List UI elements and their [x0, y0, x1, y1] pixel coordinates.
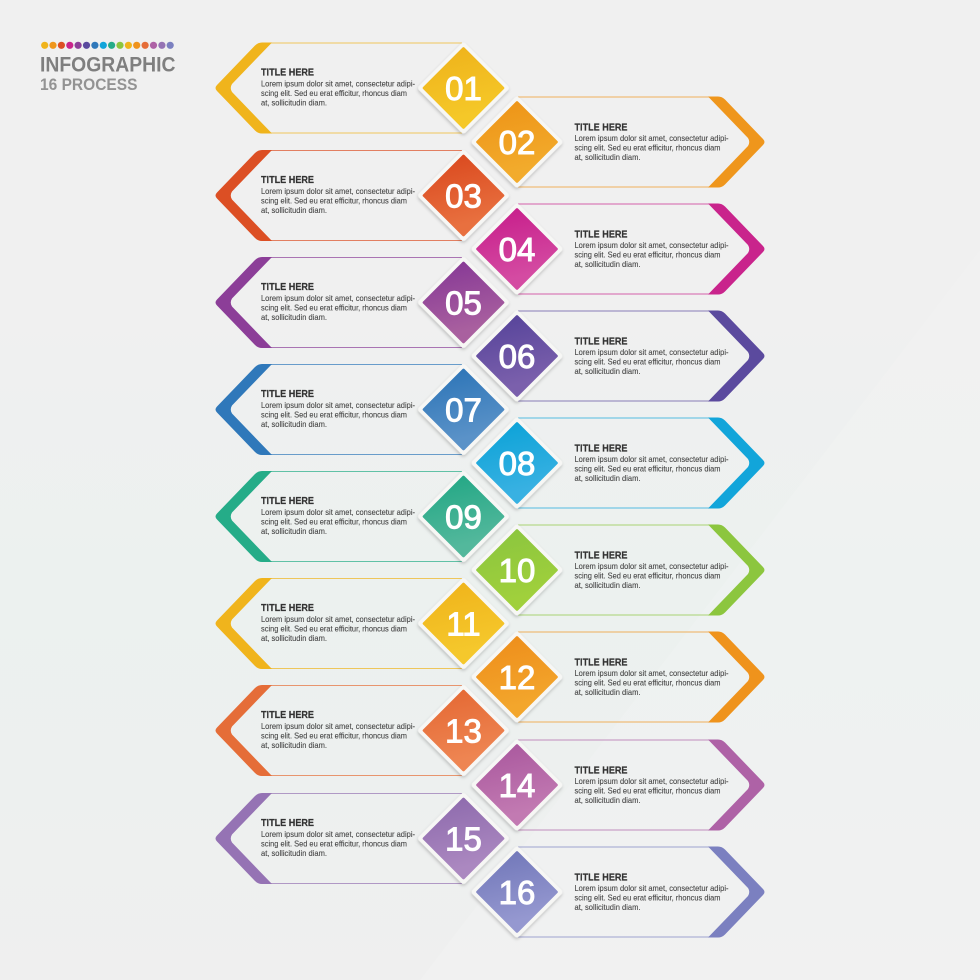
- step 11 panel: [216, 577, 510, 670]
- number badge 15: 15: [445, 820, 482, 858]
- step title: TITLE HERE: [574, 336, 628, 348]
- main heading: INFOGRAPHIC: [40, 54, 176, 76]
- header: infographic title: [40, 42, 176, 94]
- step text: scing elit. Sed eu erat efficitur, rhoncus diam: [574, 250, 720, 260]
- step 02 panel: [470, 95, 764, 189]
- step title: TITLE HERE: [574, 444, 628, 454]
- step text: Lorem ipsum dolor sit amet, consectetur adipi-: [261, 507, 415, 517]
- arrow band: [708, 310, 764, 402]
- number badge 05: 05: [445, 284, 482, 322]
- frame lines: [518, 632, 710, 722]
- number badge 07: 07: [445, 392, 482, 428]
- step title: TITLE HERE: [574, 230, 628, 240]
- step text: [261, 186, 415, 215]
- step text: scing elit. Sed eu erat efficitur, rhoncus diam: [574, 357, 720, 367]
- step text: Lorem ipsum dolor sit amet, consectetur adipi-: [574, 668, 729, 678]
- step text: at, sollicitudin diam.: [261, 205, 327, 215]
- step text: scing elit. Sed eu erat efficitur, rhoncus diam: [261, 196, 407, 206]
- step text: scing elit. Sed eu erat efficitur, rhoncus diam: [261, 410, 407, 420]
- number badge 16: 16: [499, 874, 535, 911]
- step 10 panel: [470, 523, 764, 617]
- arrow band: [708, 632, 764, 722]
- number badge 04: [470, 202, 564, 296]
- number badge 11: 11: [446, 606, 481, 642]
- number badge 08: 08: [499, 445, 535, 482]
- step 07 panel: [216, 363, 510, 456]
- arrow band: [216, 364, 272, 455]
- step title: TITLE HERE: [574, 766, 628, 776]
- arrow band: [708, 96, 764, 188]
- frame lines: [270, 794, 462, 884]
- step text: Lorem ipsum dolor sit amet, consectetur adipi-: [261, 614, 415, 624]
- arrow band: [708, 524, 764, 616]
- step title: TITLE HERE: [261, 818, 314, 829]
- step 04 panel: [470, 202, 764, 296]
- number badge 11: [417, 577, 510, 670]
- step text: scing elit. Sed eu erat efficitur, rhoncus diam: [261, 839, 407, 849]
- step text: scing elit. Sed eu erat efficitur, rhoncus diam: [574, 571, 720, 581]
- step 15 panel: [216, 792, 510, 885]
- step text: at, sollicitudin diam.: [261, 419, 327, 429]
- step text: at, sollicitudin diam.: [574, 366, 640, 376]
- step 06 panel: [470, 309, 764, 403]
- colour dots row: [41, 42, 174, 49]
- number badge 01: 01: [445, 70, 482, 107]
- number badge 10: 10: [499, 552, 535, 589]
- step text: [261, 721, 415, 750]
- step text: scing elit. Sed eu erat efficitur, rhoncus diam: [261, 88, 407, 98]
- step title: TITLE HERE: [261, 603, 314, 614]
- number badge 13: [417, 684, 510, 777]
- frame lines: [270, 472, 462, 562]
- step title: TITLE HERE: [261, 389, 314, 400]
- step text: Lorem ipsum dolor sit amet, consectetur adipi-: [261, 829, 415, 839]
- number badge 05: [417, 256, 510, 349]
- step text: scing elit. Sed eu erat efficitur, rhoncus diam: [574, 143, 720, 153]
- step text: [574, 668, 729, 697]
- frame lines: [518, 204, 710, 294]
- frame lines: [270, 364, 462, 454]
- frame lines: [270, 43, 462, 133]
- arrow band: [216, 257, 272, 348]
- step text: [261, 293, 415, 322]
- step text: Lorem ipsum dolor sit amet, consectetur adipi-: [261, 721, 415, 731]
- number badge 06: [470, 309, 564, 403]
- step text: at, sollicitudin diam.: [261, 526, 327, 536]
- step text: [574, 240, 729, 269]
- step title: TITLE HERE: [261, 67, 314, 78]
- step text: at, sollicitudin diam.: [261, 740, 327, 750]
- step text: at, sollicitudin diam.: [574, 580, 640, 590]
- number badge 10: [470, 523, 564, 617]
- number badge 09: [417, 470, 510, 563]
- step text: at, sollicitudin diam.: [261, 312, 327, 322]
- step text: [574, 347, 729, 376]
- step text: at, sollicitudin diam.: [261, 98, 327, 108]
- step text: at, sollicitudin diam.: [574, 795, 640, 805]
- number badge 12: [470, 630, 564, 724]
- step text: scing elit. Sed eu erat efficitur, rhoncus diam: [574, 893, 720, 903]
- arrow band: [216, 42, 272, 134]
- step text: scing elit. Sed eu erat efficitur, rhoncus diam: [574, 464, 720, 474]
- step text: at, sollicitudin diam.: [574, 259, 640, 269]
- step 03 panel: [216, 149, 510, 242]
- step 08 panel: [470, 416, 764, 510]
- step text: [574, 883, 729, 912]
- step text: Lorem ipsum dolor sit amet, consectetur adipi-: [261, 79, 415, 89]
- step 01 panel: [216, 41, 510, 135]
- arrow band: [216, 150, 272, 241]
- number badge 03: 03: [445, 178, 482, 214]
- number badge 09: 09: [445, 498, 482, 536]
- number badge 06: 06: [499, 338, 535, 375]
- number badge 13: 13: [445, 712, 482, 750]
- step text: Lorem ipsum dolor sit amet, consectetur adipi-: [574, 133, 729, 143]
- step text: [261, 400, 415, 429]
- frame lines: [518, 311, 710, 401]
- frame lines: [518, 97, 710, 187]
- step text: scing elit. Sed eu erat efficitur, rhoncus diam: [261, 624, 407, 634]
- number badge 08: [470, 416, 564, 510]
- step title: TITLE HERE: [261, 282, 314, 293]
- step title: TITLE HERE: [574, 550, 628, 562]
- arrow band: [708, 846, 764, 938]
- number badge 14: [470, 738, 564, 832]
- step text: [574, 561, 729, 590]
- step text: Lorem ipsum dolor sit amet, consectetur adipi-: [261, 293, 415, 303]
- step text: scing elit. Sed eu erat efficitur, rhoncus diam: [574, 786, 720, 796]
- step title: TITLE HERE: [574, 658, 628, 668]
- step title: TITLE HERE: [261, 496, 314, 507]
- step text: [574, 133, 729, 162]
- frame lines: [518, 740, 710, 830]
- step title: TITLE HERE: [574, 122, 628, 134]
- step text: scing elit. Sed eu erat efficitur, rhoncus diam: [261, 731, 407, 741]
- step text: at, sollicitudin diam.: [574, 687, 640, 697]
- number badge 14: 14: [499, 767, 535, 804]
- step text: [261, 829, 415, 858]
- frame lines: [270, 686, 462, 776]
- step text: at, sollicitudin diam.: [574, 902, 640, 912]
- step text: Lorem ipsum dolor sit amet, consectetur adipi-: [574, 883, 729, 893]
- number badge 02: [470, 95, 564, 189]
- number badge 12: 12: [499, 659, 535, 696]
- step text: at, sollicitudin diam.: [261, 633, 327, 643]
- arrow band: [216, 793, 272, 884]
- step text: Lorem ipsum dolor sit amet, consectetur adipi-: [261, 400, 415, 410]
- number badge 02: 02: [499, 124, 535, 161]
- step 16 panel: [470, 845, 764, 939]
- step 13 panel: [216, 684, 510, 777]
- number badge 15: [417, 792, 510, 885]
- step text: [261, 507, 415, 536]
- step text: [261, 79, 415, 108]
- frame lines: [518, 525, 710, 615]
- step text: Lorem ipsum dolor sit amet, consectetur adipi-: [574, 561, 729, 571]
- frame lines: [518, 847, 710, 937]
- frame lines: [270, 578, 462, 668]
- step 12 panel: [470, 630, 764, 724]
- step text: Lorem ipsum dolor sit amet, consectetur adipi-: [574, 776, 729, 786]
- step text: scing elit. Sed eu erat efficitur, rhoncus diam: [574, 678, 720, 688]
- number badge 01: [417, 41, 510, 135]
- arrow band: [216, 685, 272, 776]
- step text: [574, 454, 729, 483]
- step text: Lorem ipsum dolor sit amet, consectetur adipi-: [574, 240, 729, 250]
- step text: Lorem ipsum dolor sit amet, consectetur adipi-: [261, 186, 415, 196]
- step 09 panel: [216, 470, 510, 563]
- arrow band: [708, 418, 764, 508]
- number badge 16: [470, 845, 564, 939]
- step title: TITLE HERE: [261, 175, 314, 186]
- step text: [261, 614, 415, 643]
- step title: TITLE HERE: [574, 872, 628, 884]
- step text: Lorem ipsum dolor sit amet, consectetur adipi-: [574, 454, 729, 464]
- step text: [574, 776, 729, 805]
- frame lines: [518, 418, 710, 508]
- number badge 07: [417, 363, 510, 456]
- step 05 panel: [216, 256, 510, 349]
- step text: at, sollicitudin diam.: [574, 473, 640, 483]
- step text: scing elit. Sed eu erat efficitur, rhoncus diam: [261, 303, 407, 313]
- step title: TITLE HERE: [261, 710, 314, 721]
- frame lines: [270, 258, 462, 348]
- frame lines: [270, 150, 462, 240]
- sub heading: 16 PROCESS: [40, 76, 138, 94]
- number badge 04: 04: [499, 231, 535, 268]
- arrow band: [216, 578, 272, 669]
- arrow band: [708, 204, 764, 294]
- step text: at, sollicitudin diam.: [574, 152, 640, 162]
- step text: Lorem ipsum dolor sit amet, consectetur adipi-: [574, 347, 729, 357]
- arrow band: [708, 740, 764, 830]
- arrow band: [216, 471, 272, 562]
- step text: at, sollicitudin diam.: [261, 848, 327, 858]
- step text: scing elit. Sed eu erat efficitur, rhoncus diam: [261, 517, 407, 527]
- number badge 03: [417, 149, 510, 242]
- step 14 panel: [470, 738, 764, 832]
